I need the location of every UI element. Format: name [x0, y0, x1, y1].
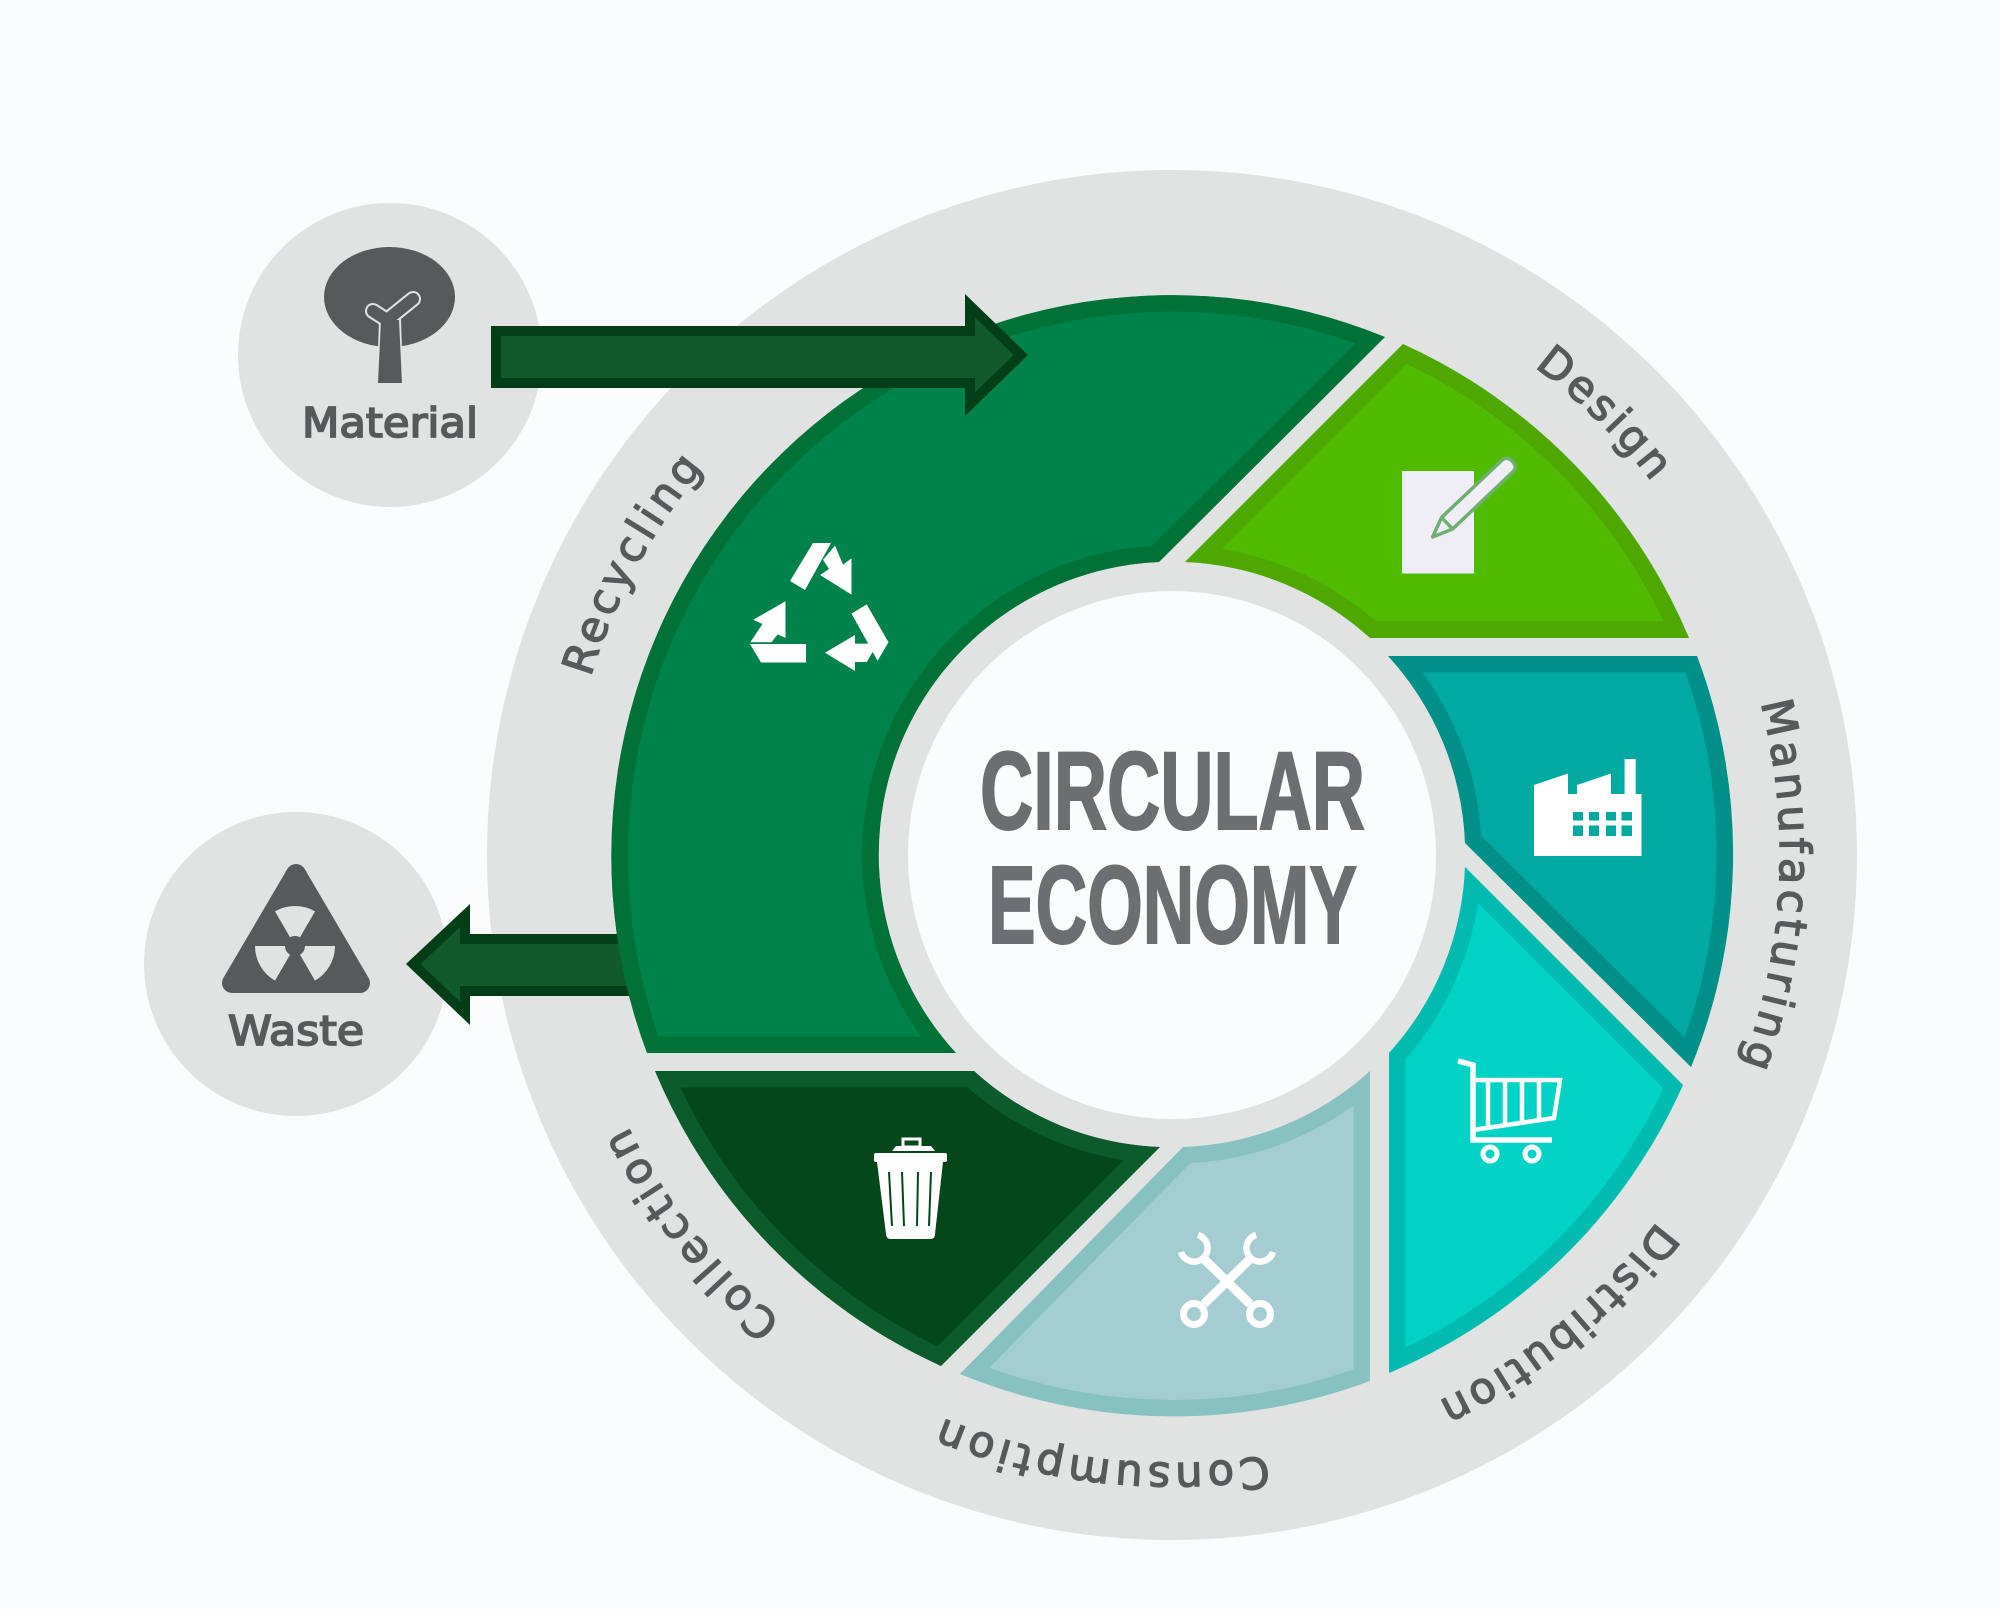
segment: manufacturing	[1388, 656, 1733, 1067]
title	[980, 730, 1365, 967]
center disc	[908, 591, 1436, 1119]
label: design: Design	[1536, 344, 1666, 480]
label: distribution: Distribution	[1440, 1224, 1680, 1420]
outer grey ring	[487, 170, 1857, 1540]
label: collection: Collection	[610, 1128, 775, 1338]
icon: recycle	[750, 543, 888, 671]
icon: crossed wrenches	[1181, 1235, 1273, 1324]
segment: collection	[655, 1071, 1160, 1366]
icon: radiation hazard	[232, 874, 360, 983]
icon: paper and pencil	[1402, 455, 1518, 574]
arrow: output to waste	[406, 904, 629, 1025]
title: CIRCULAR	[980, 730, 1365, 853]
label: waste: Waste	[228, 1007, 364, 1055]
icon: factory	[1534, 759, 1642, 856]
segment: design	[1185, 344, 1689, 638]
arrow: material input	[491, 294, 1028, 416]
label: material: Material	[302, 399, 478, 447]
icon: tree	[324, 247, 455, 383]
material node	[238, 203, 542, 507]
segment: recycling	[611, 295, 1385, 1053]
label: recycling: Recycling	[561, 456, 704, 674]
title: ECONOMY	[988, 844, 1357, 967]
label: manufacturing: Manufacturing	[1738, 699, 1814, 1070]
segment: consumption	[960, 1071, 1370, 1416]
icon: shopping cart	[1458, 1061, 1560, 1161]
segment: distribution	[1389, 867, 1683, 1373]
waste node	[144, 812, 448, 1116]
label: consumption: Consumption	[939, 1418, 1268, 1490]
icon: trash can	[874, 1139, 947, 1239]
